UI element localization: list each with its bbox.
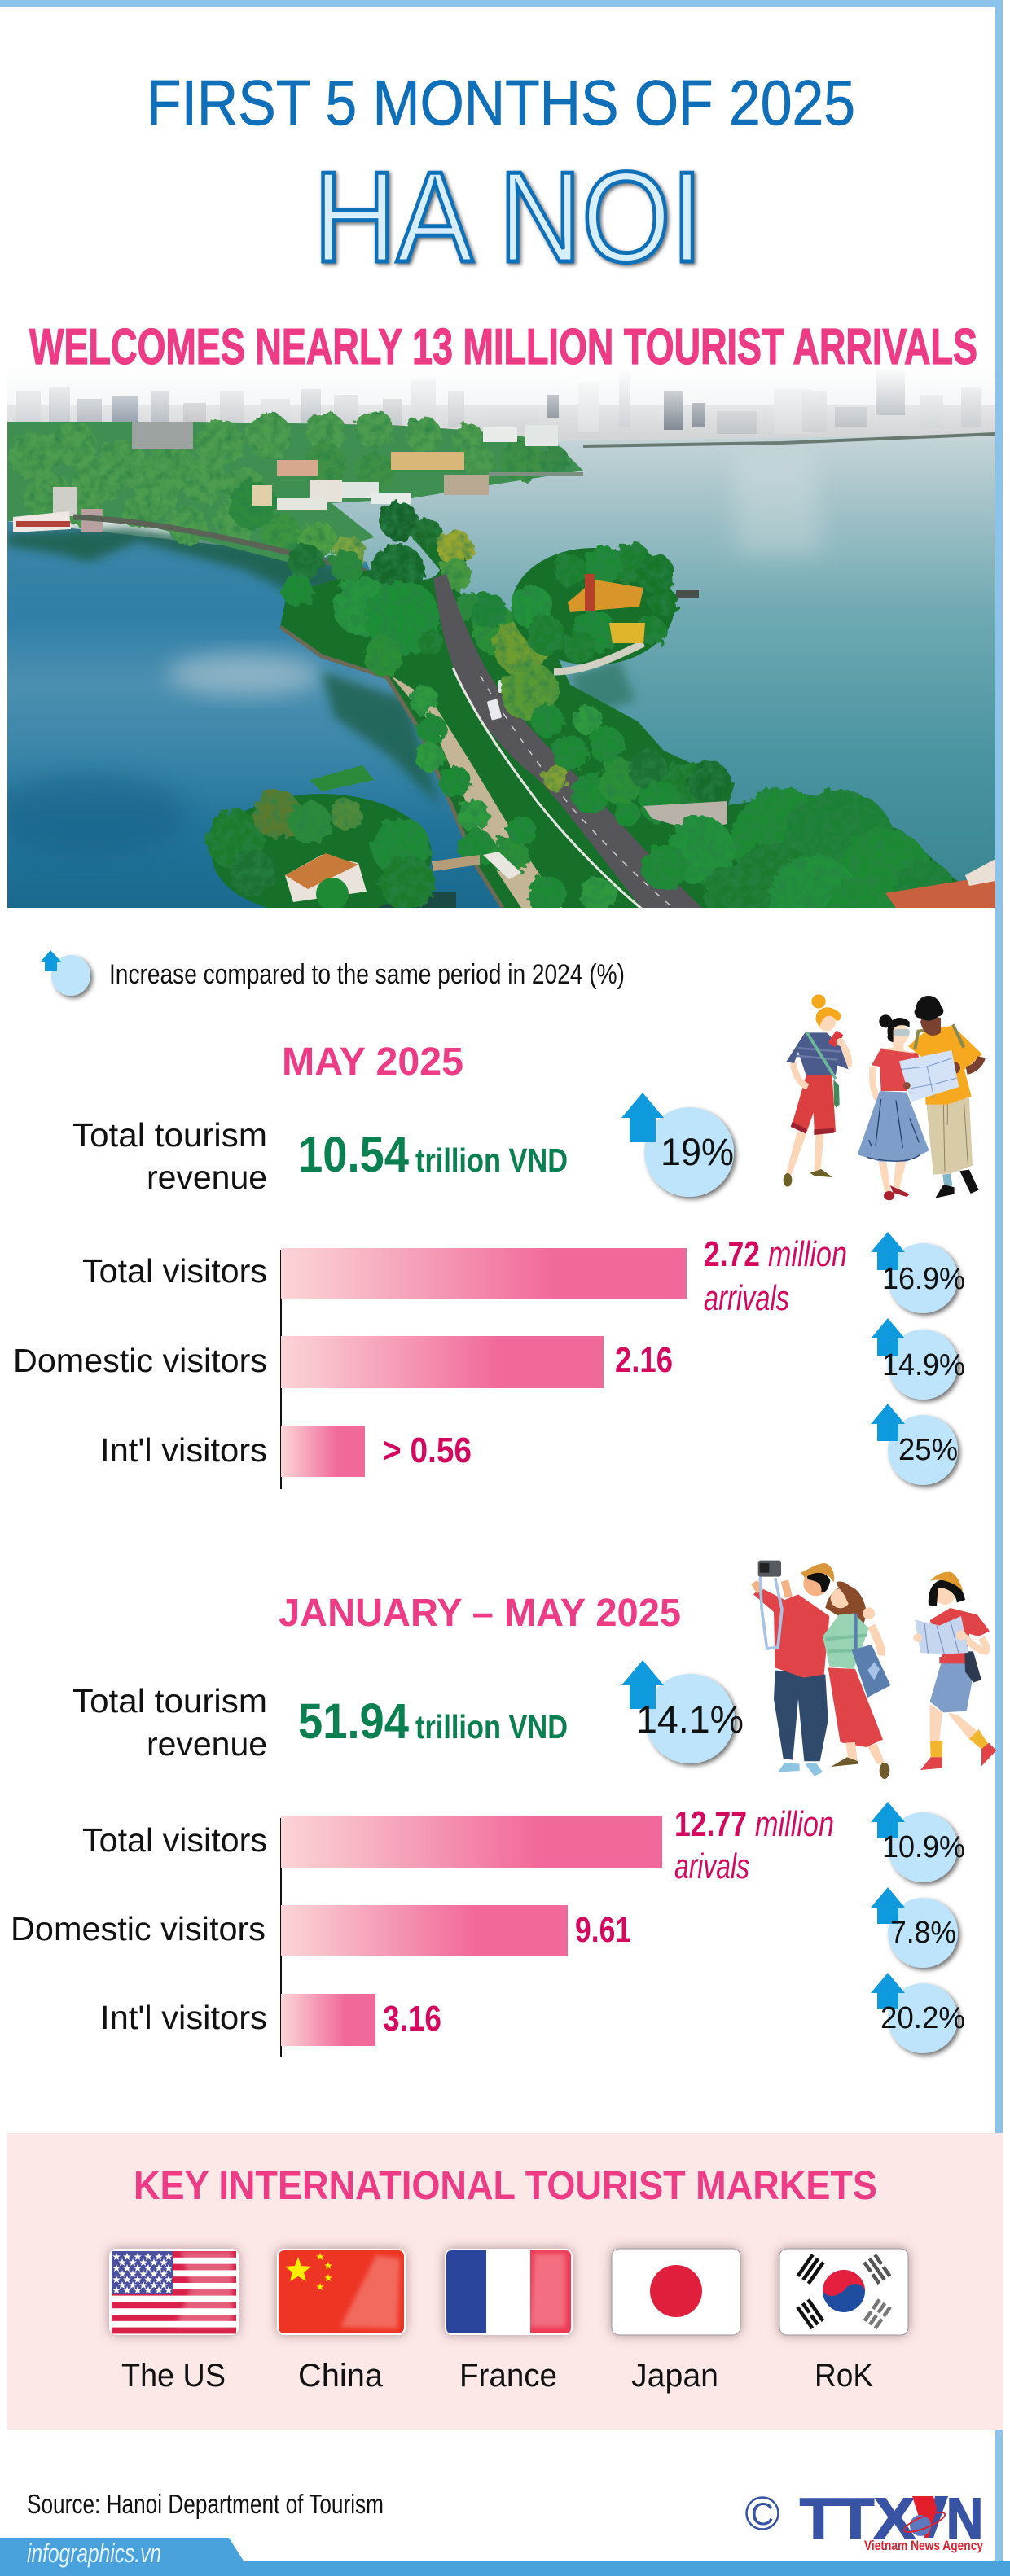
growth badge: 25% [871,1404,958,1485]
bar: total visitors: 2.72 [704,1234,760,1274]
market label: China: China [298,2358,384,2394]
bar: domestic visitors: Domestic visitors [13,1342,267,1379]
growth badge: 20.2%: 20.2% [880,2001,965,2035]
bar: total visitors [82,1234,847,1318]
legend: increase compared to 2024: Increase compared to the same period in 2024 (%) [109,959,625,990]
flag: France [445,2249,573,2335]
revenue: January to May 2025 [72,1682,568,1763]
logo: TTXVN Vietnam News Agency: C [751,2497,774,2532]
photo: West Lake aerial view [0,366,995,948]
growth badge: 14.9% [871,1318,965,1400]
bar: total visitors [82,1804,834,1886]
title: first 5 months of 2025: FIRST 5 MONTHS OF 2025 [147,67,855,138]
footer: infographics.vn tab [0,2538,244,2568]
bar: total visitors: arivals [674,1847,749,1886]
growth badge: 7.8% [871,1887,958,1968]
heading: January to May 2025: JANUARY – MAY 2025 [279,1592,681,1635]
growth badge: 19% [621,1093,734,1197]
frame: right bar [995,0,1003,2565]
revenue: January to May 2025: 51.94 [298,1693,409,1749]
revenue: May 2025: trillion VND [415,1141,568,1179]
revenue: January to May 2025: Total tourism [72,1682,267,1720]
logo: TTXVN Vietnam News Agency [746,2486,983,2553]
bar: domestic visitors [11,1905,631,1956]
bar chart: May 2025 visitors [13,1234,847,1489]
growth badge: 14.1% [621,1660,744,1763]
bar: domestic visitors [13,1336,673,1388]
growth badge: 16.9%: 16.9% [882,1262,965,1296]
bar: domestic visitors: 2.16 [615,1340,673,1380]
frame: top bar [0,0,1003,7]
bar: international visitors [100,1994,441,2046]
growth badge: 10.9%: 10.9% [882,1830,965,1864]
title: Ha Noi: HA NOI [314,146,703,289]
market label: Japan: Japan [631,2358,718,2394]
bar: total visitors: million [768,1234,847,1274]
bar: domestic visitors: Domestic visitors [11,1910,266,1947]
growth badge: 10.9% [871,1802,965,1882]
flag: Japan [612,2249,740,2335]
logo: TTXVN Vietnam News Agency: Vietnam News Agency [864,2538,983,2553]
growth badge: 16.9% [871,1232,965,1313]
illustration: three tourists with map [784,994,982,1200]
growth badge: 7.8%: 7.8% [890,1916,956,1950]
flag: China [277,2249,406,2335]
legend: increase compared to 2024 [41,950,625,996]
bar: total visitors: Total visitors [82,1821,267,1859]
revenue: May 2025: 10.54 [298,1127,409,1182]
bar: domestic visitors: 9.61 [575,1910,631,1950]
market label: France: France [459,2358,557,2394]
bar: international visitors: 3.16 [383,1999,441,2039]
flag: United States [109,2249,239,2335]
growth badge: 20.2% [871,1973,965,2053]
bar: international visitors [100,1426,472,1477]
footer: blue band [0,2561,1010,2576]
growth badge: 25%: 25% [898,1433,958,1467]
revenue: May 2025: revenue [147,1159,267,1196]
bar: international visitors: Int'l visitors [100,1431,267,1469]
revenue: May 2025: Total tourism [72,1116,267,1154]
growth badge: 14.9%: 14.9% [882,1348,965,1382]
footer: infographics.vn tab: infographics.vn [27,2539,161,2568]
market label: RoK: RoK [815,2358,873,2394]
illustration: tourists with camera and map [753,1561,996,1779]
bar: total visitors: arrivals [704,1278,789,1318]
growth badge: 19%: 19% [661,1130,734,1173]
heading: May 2025: MAY 2025 [282,1040,463,1084]
market label: The US: The US [121,2358,226,2394]
bar: international visitors: Int'l visitors [100,1999,267,2036]
growth badge: 14.1%: 14.1% [636,1698,744,1741]
bar: total visitors: Total visitors [82,1252,267,1290]
revenue: May 2025 [72,1116,568,1196]
bar chart: January to May 2025 visitors [11,1804,834,2057]
bar: international visitors: > 0.56 [383,1430,472,1470]
panel heading: KEY INTERNATIONAL TOURIST MARKETS [134,2164,877,2208]
source note: Source: Hanoi Department of Tourism [27,2489,384,2519]
revenue: January to May 2025: trillion VND [415,1708,568,1746]
revenue: January to May 2025: revenue [147,1725,267,1763]
logo: TTXVN Vietnam News Agency: N [946,2486,983,2550]
logo: TTXVN Vietnam News Agency: TTX [800,2486,915,2550]
panel: key international tourist markets [7,2133,1003,2430]
bar: total visitors: million [755,1804,834,1844]
bar: total visitors: 12.77 [674,1804,747,1844]
flag: Republic of Korea [779,2249,908,2335]
